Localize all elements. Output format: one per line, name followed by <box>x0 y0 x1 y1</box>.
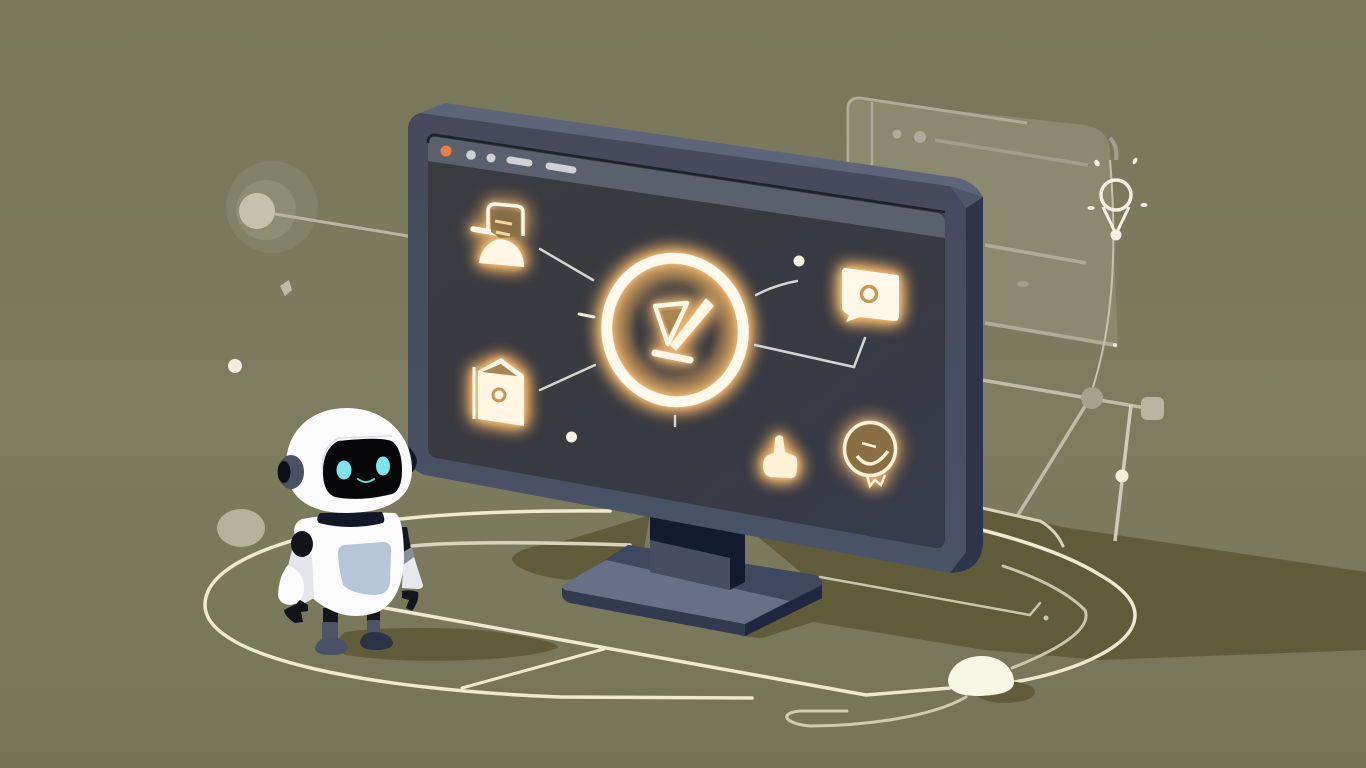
left foot <box>315 608 348 655</box>
shoulder joint <box>291 531 313 557</box>
collar <box>317 512 384 527</box>
visor <box>323 439 402 499</box>
pebble node shadow <box>975 681 1035 703</box>
chest pouch <box>338 542 391 595</box>
icon: thumbs up <box>763 435 797 478</box>
smile <box>358 479 374 482</box>
head <box>286 408 412 513</box>
connector lines <box>540 249 865 426</box>
monitor shadow on ground <box>740 500 1366 660</box>
monitor body <box>408 112 983 573</box>
gauge icon <box>655 298 714 360</box>
body <box>294 513 404 616</box>
inner glow <box>623 274 727 386</box>
shadow under stand <box>512 515 650 580</box>
dot lower <box>566 432 577 442</box>
eyes <box>336 460 352 480</box>
panel: faded back window <box>848 98 1118 390</box>
icon: smiling balloon <box>844 422 896 486</box>
white dot <box>228 359 242 373</box>
central badge <box>591 243 759 417</box>
icon: map pin bulb <box>1088 157 1148 240</box>
pebble node <box>948 656 1014 696</box>
robot <box>278 408 423 655</box>
icon: chat bubble <box>842 268 899 322</box>
right foot <box>360 608 393 650</box>
ear left <box>278 455 304 489</box>
small pebble <box>280 280 292 296</box>
tan blob <box>217 509 265 547</box>
left pulse node <box>226 161 408 253</box>
icon: person with card <box>473 204 524 267</box>
ear right <box>409 447 417 474</box>
right network lines <box>982 380 1164 541</box>
robot shadow <box>338 628 558 661</box>
ring <box>591 243 759 417</box>
icon: book with circle <box>474 358 524 426</box>
ground circuit lines <box>205 508 1135 726</box>
dots <box>794 256 804 266</box>
monitor stand <box>562 515 822 636</box>
left arm <box>278 550 314 623</box>
window controls <box>440 146 573 170</box>
back right arm <box>402 527 423 611</box>
monitor <box>408 103 983 573</box>
screen <box>428 135 945 548</box>
browser title bar <box>428 137 945 238</box>
